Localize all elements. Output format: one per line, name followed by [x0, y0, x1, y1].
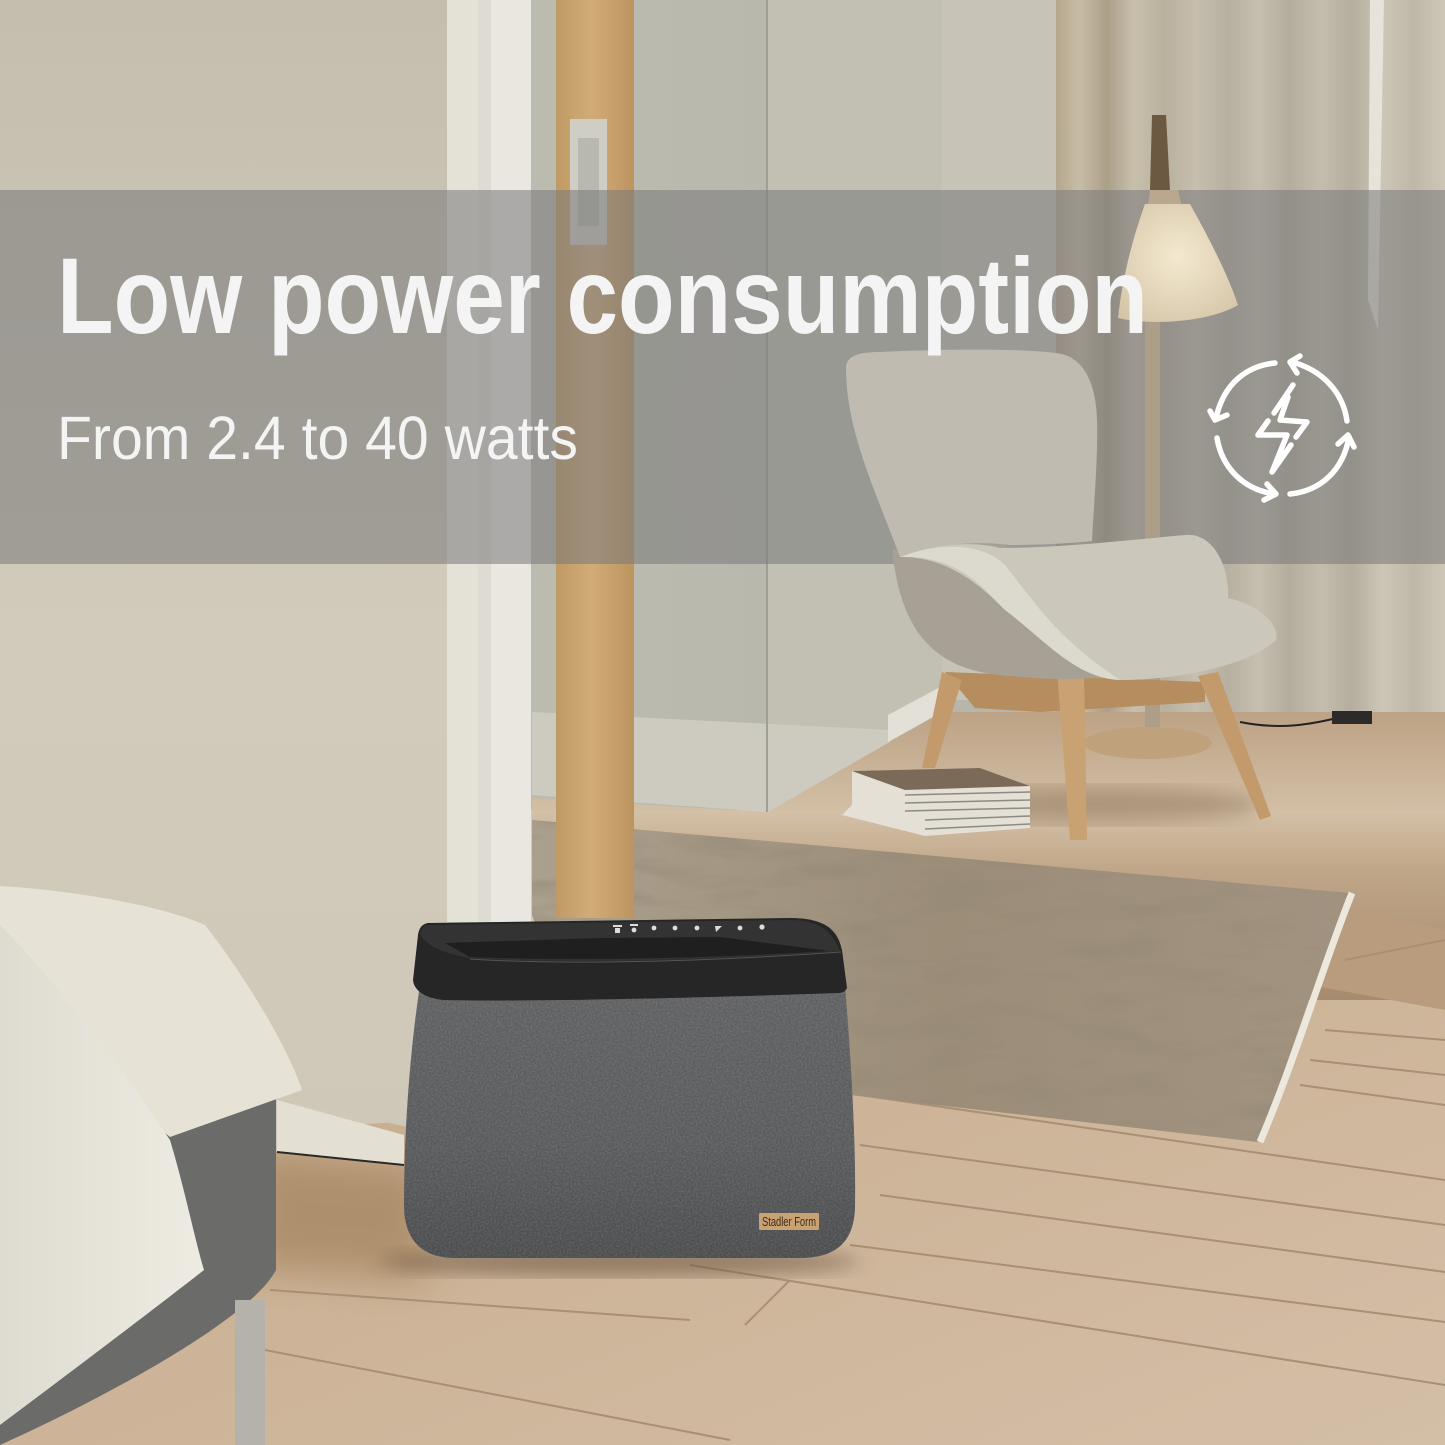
magazines [842, 768, 1030, 836]
glass partition and rear room [530, 0, 1060, 812]
lounge chair [846, 350, 1277, 840]
curtains [1056, 0, 1445, 712]
icon: energy cycle with lightning bolt [1210, 356, 1354, 500]
left wall panel with skirting [0, 0, 531, 1165]
wooden floor [0, 712, 1445, 1445]
translucent grey banner [0, 190, 1445, 564]
air humidifier product [277, 918, 860, 1276]
bed [0, 886, 302, 1445]
subtitle: From 2.4 to 40 watts [57, 404, 578, 472]
control icons [613, 924, 765, 933]
brand plate [759, 1213, 819, 1230]
floor lamp [1084, 115, 1372, 759]
title: Low power consumption [57, 235, 1148, 356]
fabric body [400, 980, 860, 1260]
rug [532, 820, 1362, 1145]
black top tray [413, 918, 847, 1001]
wooden door post with switch [556, 0, 634, 918]
brand plate: Stadler Form [762, 1214, 816, 1229]
